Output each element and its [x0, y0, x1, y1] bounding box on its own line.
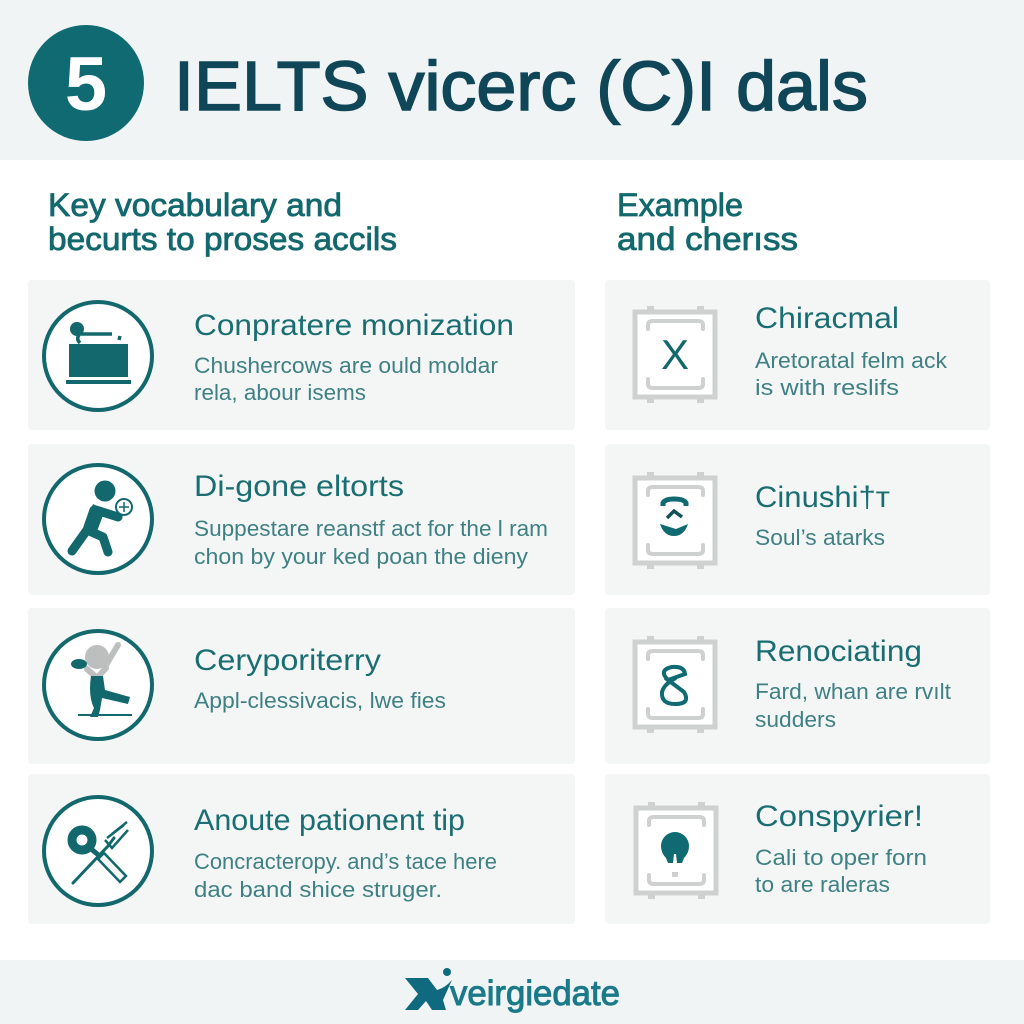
- icon: battery box: [44, 302, 152, 410]
- logo mark: [405, 968, 452, 1010]
- card text: Cinushi†т: [755, 481, 890, 514]
- card text: [755, 635, 951, 732]
- card text: [194, 470, 548, 569]
- card text: [755, 481, 890, 550]
- heading: left column: [48, 187, 397, 257]
- card text: Cali to oper forn: [755, 845, 927, 870]
- card text: [755, 800, 927, 897]
- card text: Appl-clessivacis, lwe fies: [194, 688, 446, 713]
- card text: Soul’s atarks: [755, 525, 885, 550]
- icon: dancing figure: [44, 631, 152, 739]
- icon: framed X: [635, 306, 715, 403]
- card text: Chiracmal: [755, 302, 899, 335]
- panel: left card 4: [28, 774, 575, 924]
- heading: right column: [617, 187, 798, 257]
- card text: Chushercows are ould moldar: [194, 353, 498, 378]
- panel: right card 2: [605, 444, 990, 595]
- card text: [194, 309, 514, 405]
- card text: [194, 804, 497, 902]
- heading: left column: Key vocabulary and: [48, 187, 342, 223]
- card text: to are raleras: [755, 872, 890, 897]
- card text: is with reslifs: [755, 375, 899, 400]
- icon: framed X: X: [661, 331, 689, 378]
- heading: right column: Example: [617, 187, 743, 223]
- card text: Anoute pationent tip: [194, 804, 465, 837]
- logo wordmark: veirgiedate: [450, 974, 620, 1013]
- icon: framed bulb: [636, 802, 716, 899]
- panel: left card 2: [28, 444, 575, 595]
- icon: running person with badge: [44, 465, 152, 573]
- card text: Di-gone eltorts: [194, 470, 404, 503]
- card text: [755, 302, 948, 400]
- title: IELTS vicerc (C)I dals: [174, 47, 868, 125]
- panel: left card 1: [28, 280, 575, 430]
- panel: right card 3: [605, 608, 990, 764]
- card text: Ceryporiterry: [194, 644, 381, 677]
- panel: left card 3: [28, 608, 575, 764]
- number badge: [28, 25, 144, 141]
- card text: [194, 644, 446, 713]
- heading: right column: and cherıss: [617, 221, 798, 257]
- icon: framed knot: [635, 636, 715, 733]
- card text: chon by your ked poan the dieny: [194, 544, 528, 569]
- card text: Conpratere monization: [194, 309, 514, 342]
- card text: Suppestare reanstf act for the l ram: [194, 516, 548, 541]
- card text: rela, abour isems: [194, 380, 366, 405]
- icon: framed exchange: [635, 472, 715, 569]
- card text: Renociating: [755, 635, 922, 668]
- card text: Aretoratal felm ack: [755, 348, 948, 373]
- icon: crossed tools: [44, 797, 152, 905]
- number badge: 5: [65, 42, 107, 127]
- card text: Concracteropy. and’s tace here: [194, 849, 497, 874]
- header band: [0, 0, 1024, 160]
- card text: dac band shice struger.: [194, 877, 442, 902]
- panel: right card 4: [605, 774, 990, 924]
- footer band: [0, 960, 1024, 1024]
- panel: right card 1: [605, 280, 990, 430]
- card text: sudders: [755, 707, 836, 732]
- card text: Conspyrier!: [755, 800, 923, 833]
- card text: Fard, whan are rvılt: [755, 679, 951, 704]
- heading: left column: becurts to proses accils: [48, 221, 397, 257]
